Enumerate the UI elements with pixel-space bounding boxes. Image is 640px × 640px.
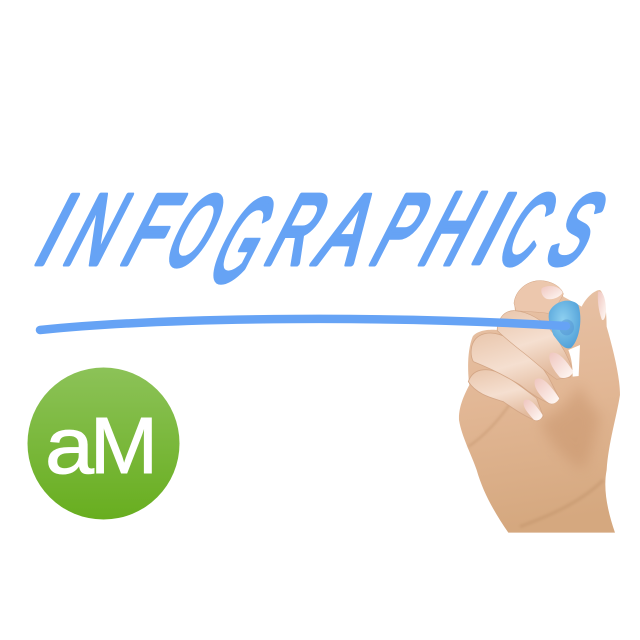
hand and palm bbox=[459, 281, 620, 533]
heading: INFOGRAPHICS bbox=[19, 172, 624, 307]
heading: INFOGRAPHICS: I bbox=[19, 173, 96, 285]
heading: INFOGRAPHICS: C bbox=[482, 175, 573, 286]
wrist crease bbox=[520, 480, 603, 527]
palm crease bbox=[468, 402, 512, 447]
heading: INFOGRAPHICS: P bbox=[355, 173, 449, 285]
marker cap bbox=[549, 301, 580, 348]
logo text: M bbox=[90, 402, 158, 491]
logo: aM badge bbox=[28, 368, 180, 520]
heading: INFOGRAPHICS: A bbox=[300, 175, 398, 286]
heading: INFOGRAPHICS: F bbox=[106, 175, 199, 286]
underline stroke bbox=[40, 319, 566, 330]
logo text: a bbox=[45, 401, 94, 490]
nails bbox=[524, 286, 606, 420]
ring finger bbox=[471, 333, 559, 404]
middle finger bbox=[497, 311, 573, 379]
heading: INFOGRAPHICS: I bbox=[456, 172, 533, 284]
index finger bbox=[514, 281, 563, 313]
marker nib ring bbox=[559, 319, 574, 335]
icon: hand holding marker bbox=[459, 281, 620, 533]
logo circle bbox=[28, 368, 180, 520]
heading: INFOGRAPHICS: S bbox=[530, 173, 624, 285]
heading: INFOGRAPHICS: G bbox=[190, 175, 296, 307]
heading: INFOGRAPHICS: H bbox=[403, 172, 502, 287]
heading: INFOGRAPHICS: R bbox=[250, 173, 347, 285]
heading: INFOGRAPHICS: O bbox=[149, 176, 243, 287]
pinky finger bbox=[468, 370, 543, 421]
gap between finger and thumb bbox=[568, 345, 580, 377]
logo text bbox=[45, 401, 158, 491]
palm shading bbox=[540, 383, 600, 470]
heading: INFOGRAPHICS: N bbox=[49, 173, 148, 285]
